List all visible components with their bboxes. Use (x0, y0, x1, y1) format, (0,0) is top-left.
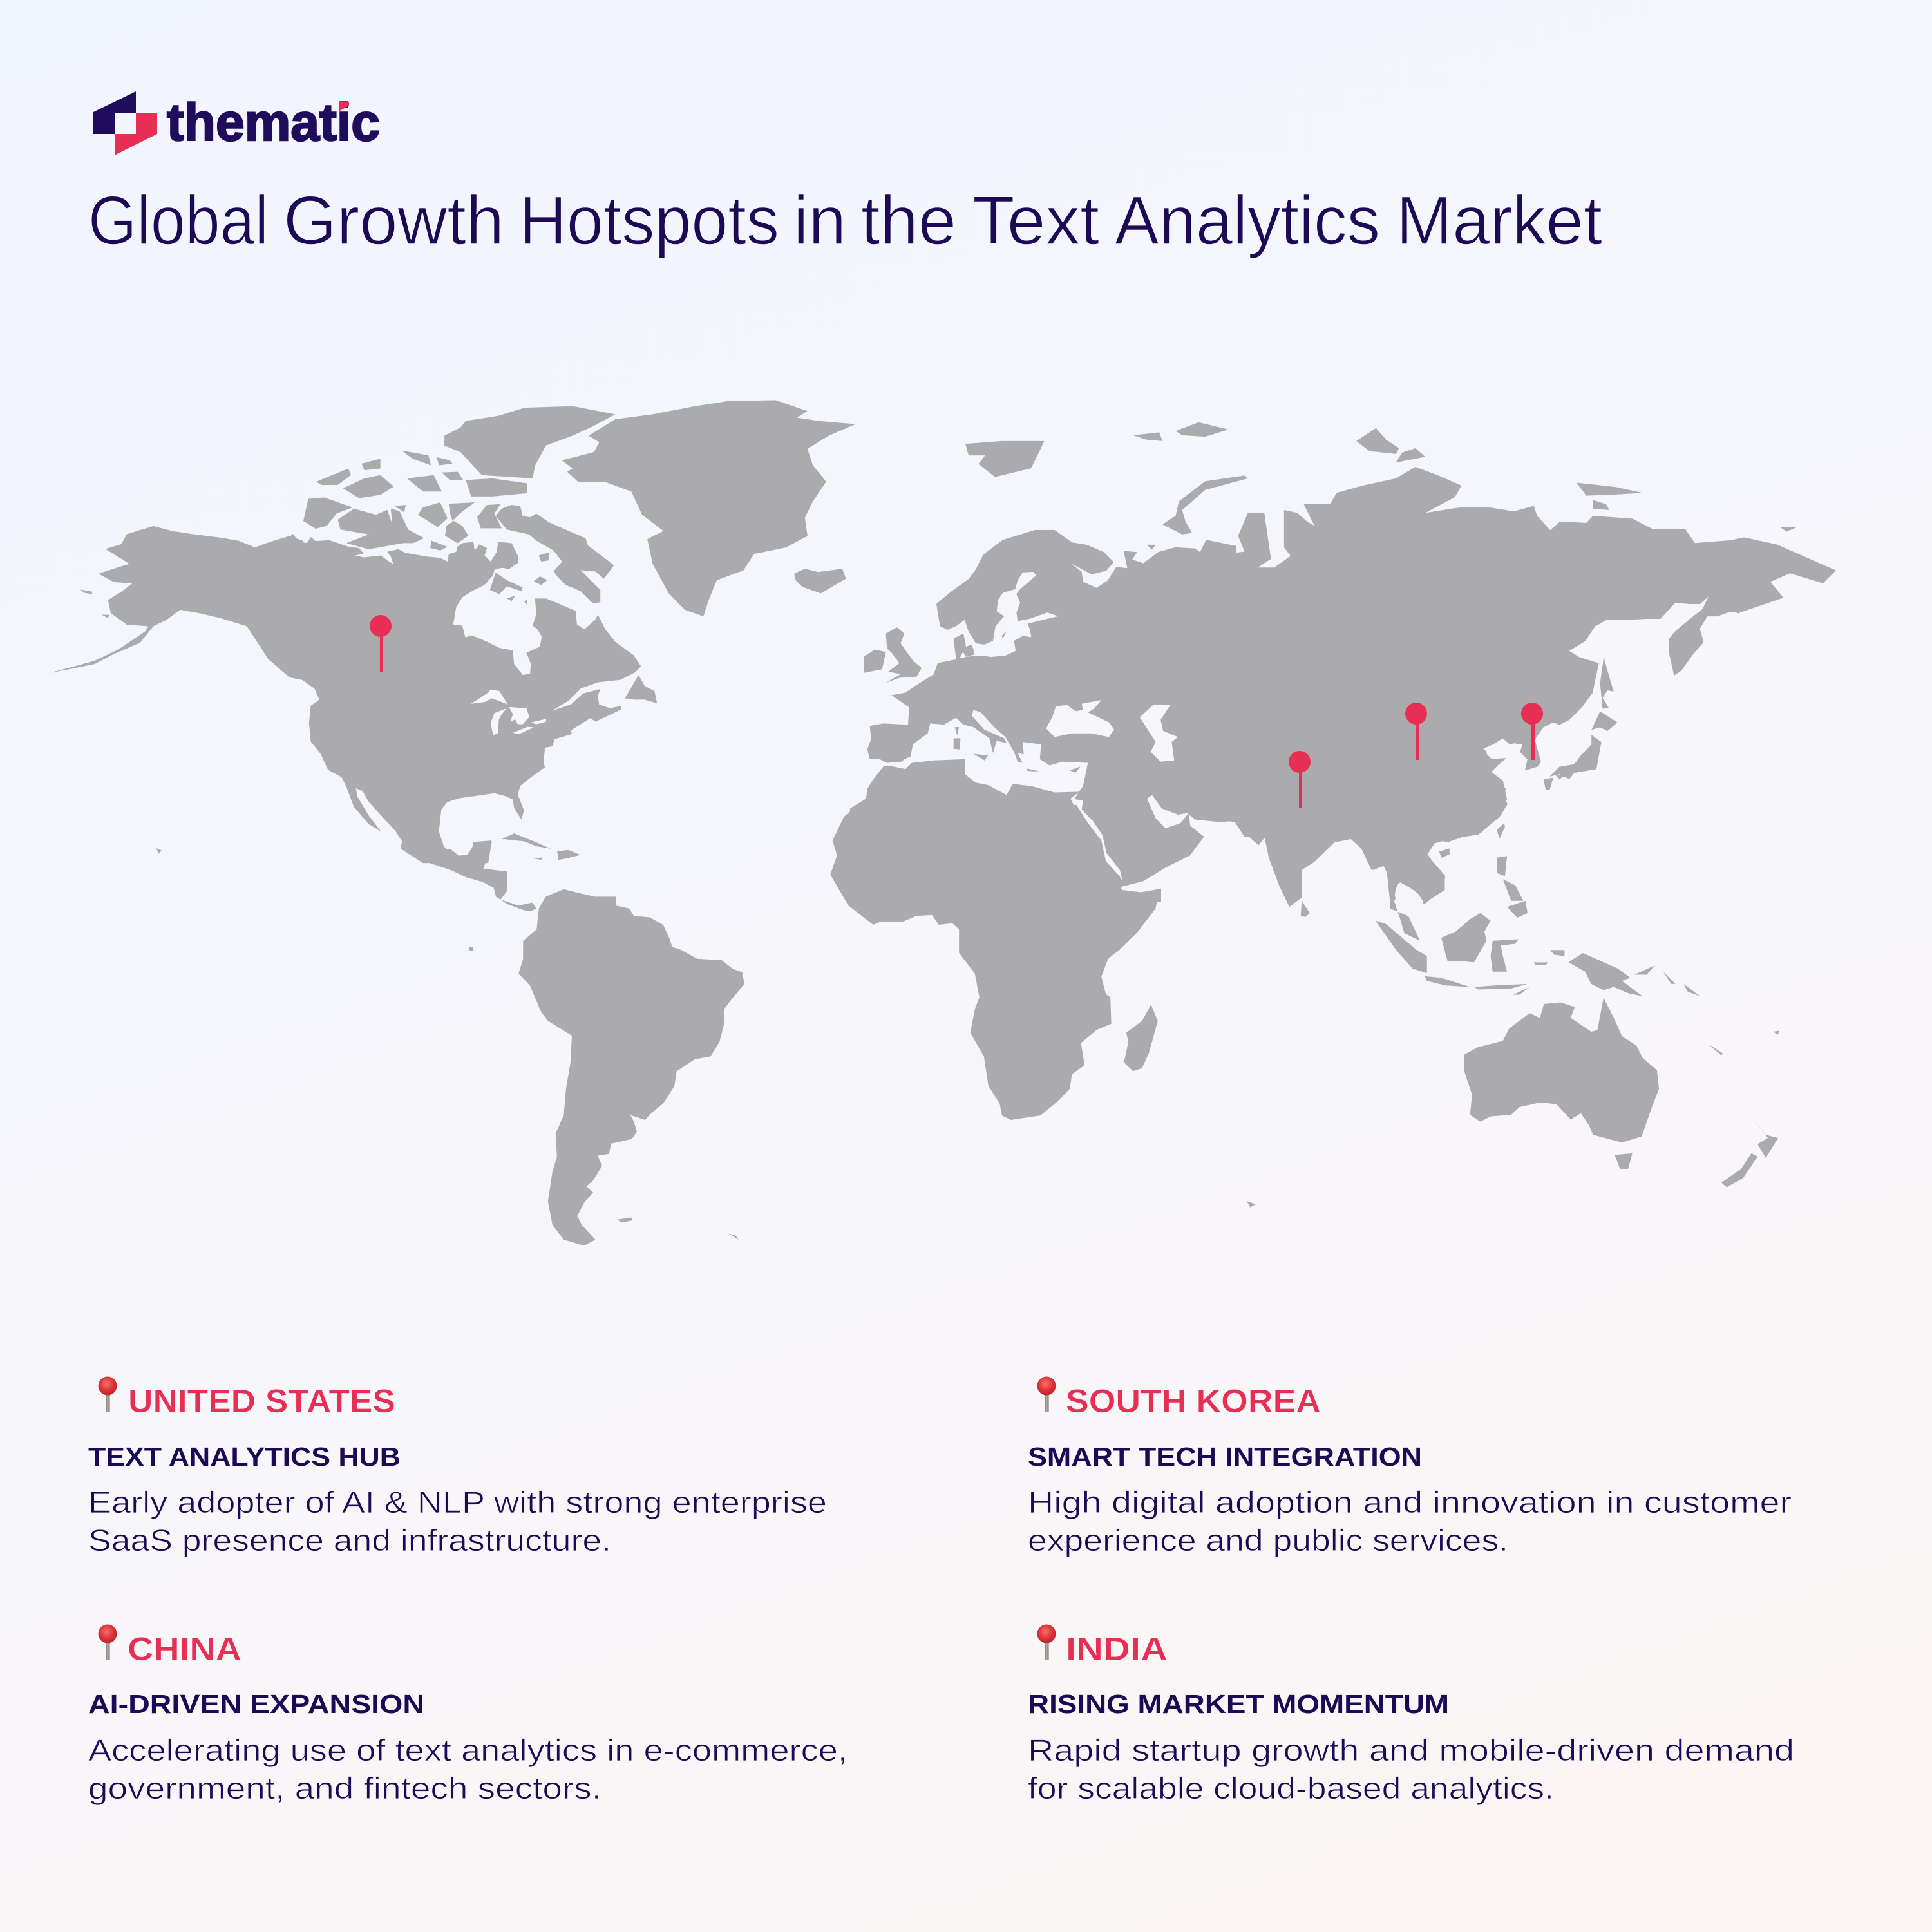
description: SaaS presence and infrastructure. (88, 1523, 611, 1557)
central and south america (419, 840, 744, 1245)
icon: pushpin (1037, 1624, 1056, 1660)
title: Growth (283, 182, 504, 259)
alaska and northern islands (50, 400, 856, 854)
subheading: TEXT ANALYTICS HUB (88, 1442, 401, 1472)
description: for scalable cloud-based analytics. (1028, 1771, 1554, 1805)
map pin: south korea (1521, 703, 1543, 760)
description (1028, 1485, 1792, 1557)
africa (830, 759, 1161, 1120)
map pin: india (1289, 751, 1311, 808)
subheading: SMART TECH INTEGRATION (1028, 1442, 1422, 1472)
south and southeast asia (1224, 741, 1700, 996)
description (88, 1733, 848, 1805)
country heading: UNITED STATES (128, 1383, 395, 1419)
map pin: united states (370, 615, 392, 672)
world map (50, 400, 1836, 1245)
description: Accelerating use of text analytics in e-commerce, (88, 1733, 848, 1767)
east asia (1352, 547, 1739, 907)
icon: pushpin (1037, 1377, 1056, 1412)
description: Early adopter of AI & NLP with strong enterprise (88, 1485, 827, 1519)
description: experience and public services. (1028, 1523, 1508, 1557)
title: Market (1396, 182, 1602, 259)
country heading: INDIA (1066, 1631, 1168, 1667)
australia and oceania (1247, 998, 1779, 1208)
europe and middle east (864, 530, 1236, 886)
description (1028, 1733, 1794, 1805)
country heading: CHINA (128, 1631, 242, 1667)
eurasia (864, 422, 1836, 907)
logo: thematic (93, 91, 380, 155)
panel: south korea (1028, 1377, 1792, 1557)
subheading: RISING MARKET MOMENTUM (1028, 1689, 1449, 1719)
description: government, and fintech sectors. (88, 1771, 601, 1805)
title: Analytics (1115, 182, 1380, 259)
subheading: AI-DRIVEN EXPANSION (88, 1689, 424, 1719)
title: Hotspots (519, 182, 779, 259)
description: Rapid startup growth and mobile-driven demand (1028, 1733, 1794, 1767)
panel: china (88, 1624, 848, 1805)
north america mainland and canadian arctic (290, 498, 657, 863)
title: Text (972, 182, 1099, 259)
title: the (861, 182, 956, 259)
description (88, 1485, 827, 1557)
panel: india (1028, 1624, 1794, 1805)
siberia and arctic islands (965, 422, 1836, 837)
map pin: china (1405, 703, 1427, 760)
panel: united states (88, 1377, 827, 1557)
logo: thematic: thematic (167, 93, 380, 152)
title: Global (88, 182, 269, 259)
title: in (793, 182, 846, 259)
country heading: SOUTH KOREA (1066, 1383, 1321, 1419)
icon: pushpin (98, 1377, 117, 1412)
icon: pushpin (98, 1624, 117, 1660)
description: High digital adoption and innovation in customer (1028, 1485, 1792, 1519)
